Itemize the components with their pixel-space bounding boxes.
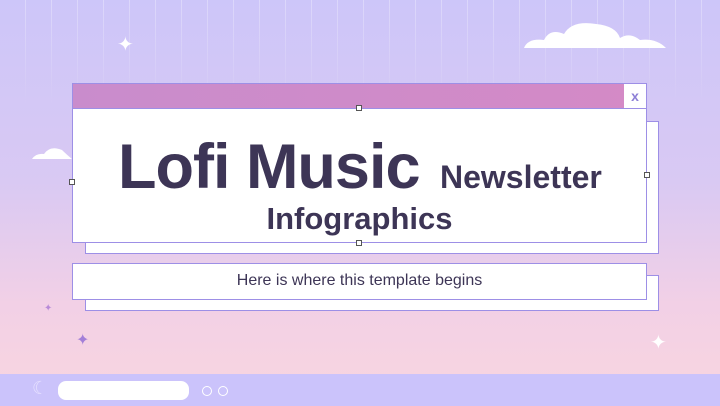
- title bar: [72, 83, 647, 109]
- heading: Lofi Music: [118, 132, 420, 202]
- icon: sparkle right: ✦: [650, 332, 667, 354]
- subtitle box: Here is where this template begins: [237, 272, 482, 289]
- close button: x: [631, 88, 639, 104]
- cloud: top right: [524, 23, 666, 48]
- title window shadow: [85, 121, 659, 254]
- heading: [118, 132, 602, 202]
- icon: sparkle top: ✦: [117, 34, 134, 56]
- bottom bar: [0, 374, 720, 406]
- subtitle box: [72, 263, 647, 300]
- subheading: Infographics: [266, 201, 452, 236]
- icon: sparkle left purple: ✦: [76, 332, 89, 349]
- cloud: left: [32, 148, 72, 159]
- heading: Newsletter: [440, 159, 602, 195]
- icon: sparkle small: ✦: [44, 303, 52, 314]
- close button: [624, 84, 646, 108]
- search bar: [58, 381, 189, 400]
- icon: moon: ☾: [32, 378, 48, 398]
- title window: [69, 83, 650, 246]
- icon: circles: [202, 386, 212, 396]
- title body: [72, 108, 647, 243]
- subtitle shadow: [85, 275, 659, 311]
